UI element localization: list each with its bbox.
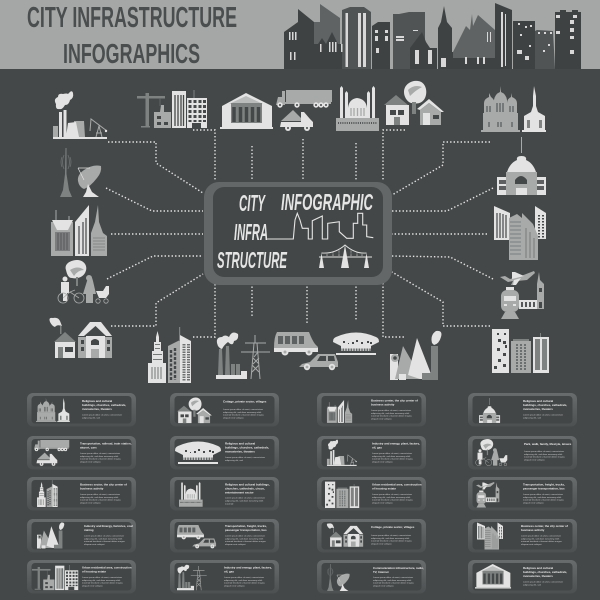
card: column 3 row 1: Lorem ipsum dolor sit amet, consectetuer [371,409,411,412]
card: column 2 row 4: euismod tincidunt ut laoreet dolore magna [225,540,267,543]
card: column 3 row 5: adipiscing elit, sed diam nonummy nibh [373,579,412,582]
card: column 4 row 2: Park, walk, family, lifestyle, leisure [524,442,572,446]
central title text: INFOGRAPHIC [281,189,373,215]
card: column 4 row 5: Lorem ipsum dolor sit amet, consectetuer [523,580,563,584]
card: column 1 row 2 [27,436,136,470]
card: column 4 row 1: buildings, churches, cathedrals, [523,403,567,407]
icon: houses [49,318,112,358]
card: column 4 row 3: adipiscing elit, sed diam nonummy nibh [523,496,562,499]
card: column 3 row 5 [317,560,426,594]
card: column 2 row 3: entertainment sector [225,490,254,494]
card: column 4 row 5 [468,560,577,594]
card: column 1 row 2: adipiscing elit, sed diam nonummy nibh [80,455,119,458]
card: column 2 row 4 [170,519,279,552]
icon: churches [481,86,546,132]
card: column 2 row 3 [170,477,279,510]
card: column 3 row 5: Communication infrastructure, radio, [373,566,424,570]
card: column 1 row 5: aliquam erat volutpat. [82,584,103,587]
card: column 2 row 4: Lorem ipsum dolor sit amet, consectetuer [225,534,265,538]
icon: temple [220,93,273,129]
card: column 1 row 4: aliquam erat volutpat. [84,543,105,546]
card: column 3 row 3: Urban residential area, construction [372,482,422,486]
card: column 4 row 1: adipiscing elit, sed [523,417,542,420]
card: column 4 row 3: Transportation, freight, trucks, [523,482,565,486]
icon: factory [53,91,107,139]
card: column 4 row 3: passenger transportation, bus [523,486,565,490]
card: column 2 row 5: Lorem ipsum dolor sit amet, consectetuer [224,576,264,579]
icon: bus [274,332,318,356]
card: column 2 row 1: Lorem ipsum dolor sit amet, consectetuer [223,408,263,411]
card: column 1 row 2: aliquam erat volutpat. [80,460,101,463]
icon: apartment tower [148,327,191,383]
card: column 4 row 5: monasteries, theaters [523,574,553,578]
card: column 1 row 1: buildings, churches, cathedrals, [82,403,126,407]
card: column 1 row 5 [27,560,136,594]
panel: central title [204,182,392,285]
card: column 3 row 1: Business center, the city center of [371,398,418,402]
card: column 3 row 3: euismod tincidunt ut laoreet dolore magna [372,499,414,502]
card: column 1 row 5: adipiscing elit, sed diam nonummy nibh [82,579,121,582]
card: column 2 row 4: passenger transportation, bus [225,528,267,532]
card: column 3 row 4: adipiscing elit, sed diam nonummy nibh [371,537,410,540]
card: column 3 row 2 [317,436,426,470]
card: column 2 row 5 [170,560,279,594]
card: column 3 row 3: Lorem ipsum dolor sit amet, consectetuer [372,493,412,496]
card: column 3 row 2: Lorem ipsum dolor sit amet, consectetuer [372,452,412,455]
card: column 4 row 1: Lorem ipsum dolor sit amet, consectetuer [523,414,563,416]
card: column 2 row 5: oil, gas [224,569,234,573]
card: column 3 row 5: Lorem ipsum dolor sit amet, consectetuer [373,576,413,579]
card: column 1 row 4: Lorem ipsum dolor sit amet, consectetuer [84,534,124,538]
card: column 2 row 3: Religious and cultural buildings, [225,482,270,486]
card: column 2 row 3: Lorem ipsum dolor sit amet, consectetuer [225,496,265,500]
card: column 1 row 4 [27,519,136,552]
card: column 3 row 2: Industry and energy, plant, factory, [372,442,420,446]
card: column 2 row 2: monasteries, theaters [225,450,255,454]
card: column 3 row 3: aliquam erat volutpat. [372,501,393,504]
card: column 2 row 2: adipiscing elit, sed [225,459,244,462]
card: column 1 row 4: adipiscing elit, sed diam nonummy nibh [84,537,123,540]
card: column 1 row 4: euismod tincidunt ut laoreet dolore magna [84,540,126,543]
card: column 3 row 1 [317,393,426,426]
dotted connectors [106,130,493,337]
card: column 1 row 5: Urban residential area, construction [82,566,132,570]
card: column 4 row 4: euismod tincidunt ut laoreet dolore magna [521,540,563,543]
card: column 1 row 1: Lorem ipsum dolor sit amet, consectetuer [82,414,122,416]
central title text: STRUCTURE [217,247,287,273]
card: column 2 row 2: Lorem ipsum dolor sit amet, consectetuer [225,456,265,459]
title: INFOGRAPHICS [63,38,200,69]
card: column 4 row 4 [468,519,577,552]
card: column 2 row 3: churches, cathedrals, circus, [225,486,265,490]
card: column 1 row 2: airport, cars [80,445,97,449]
card: column 3 row 2: euismod tincidunt ut laoreet dolore magna [372,458,414,461]
card: column 3 row 3 [317,477,426,510]
icon: cottages and tree [384,81,444,125]
card: column 4 row 5: Religious and cultural [523,566,553,570]
card: column 1 row 1: Religious and cultural [82,399,112,403]
icon: antenna and dish [60,148,101,197]
card: column 1 row 3: business activity [80,486,104,490]
card: column 4 row 4: aliquam erat volutpat. [521,543,542,546]
card: column 3 row 4: Cottage, private sector, villages [371,525,415,529]
card: column 4 row 2 [468,436,577,470]
card: column 4 row 4: business activity [521,528,545,532]
icon: factory and pylon [216,333,270,379]
card: column 3 row 1: euismod tincidunt ut laoreet dolore magna [371,415,413,418]
card: column 1 row 3: Lorem ipsum dolor sit amet, consectetuer [80,493,120,496]
card: column 4 row 2: Lorem ipsum dolor sit amet, consectetuer [524,450,564,453]
card: column 1 row 5: euismod tincidunt ut laoreet dolore magna [82,582,124,585]
card: column 3 row 4: Lorem ipsum dolor sit amet, consectetuer [371,534,411,537]
card: column 2 row 1: aliquam erat volutpat. [223,416,244,419]
card: column 1 row 1: monasteries, theaters [82,407,112,411]
card: column 3 row 2: adipiscing elit, sed diam nonummy nibh [372,455,411,458]
icon: skyline outline [267,213,373,239]
card: column 3 row 5: euismod tincidunt ut laoreet dolore magna [373,582,415,585]
card: column 3 row 1: aliquam erat volutpat. [371,417,392,420]
card: column 2 row 3: euismod [225,504,234,506]
card: column 1 row 3 [27,477,136,510]
icon: bridge [319,245,372,268]
icon: plane [500,271,535,285]
card: column 3 row 1: business activity [371,402,395,406]
card: column 4 row 4: Lorem ipsum dolor sit amet, consectetuer [521,534,561,538]
icon: domed building [497,137,546,195]
card: column 3 row 3: of housing estate [372,486,396,490]
card: column 3 row 2: oil, gas [372,445,382,449]
card: column 4 row 1 [468,393,577,426]
card: column 1 row 2: Lorem ipsum dolor sit amet, consectetuer [80,452,120,455]
card: column 2 row 2: buildings, churches, cathedrals, [225,446,269,450]
card: column 4 row 3: Lorem ipsum dolor sit amet, consectetuer [523,493,563,496]
central title text [217,189,373,273]
card: column 4 row 5: buildings, churches, cathedrals, [523,570,567,574]
card: column 4 row 2: euismod tincidunt ut laoreet dolore magna [524,456,566,459]
card: column 2 row 4: Transportation, freight, trucks, [225,524,267,528]
card: column 1 row 5: Lorem ipsum dolor sit amet, consectetuer [82,576,122,579]
card: column 2 row 1: Cottage, private sector, villages [223,400,267,404]
title: CITY INFRASTRUCTURE [27,2,237,34]
card: column 1 row 5: of housing estate [82,569,106,573]
card: column 1 row 2: Transportation, railroad, train station, [80,442,132,446]
card: column 3 row 5: TV, Internet [373,570,389,574]
icon: apartment buildings [492,329,549,373]
card: column 1 row 2: euismod tincidunt ut laoreet dolore magna [80,458,122,461]
card: column 1 row 1 [27,393,136,426]
card: column 4 row 1: Religious and cultural [523,399,553,403]
card: column 4 row 3: aliquam erat volutpat. [523,501,544,504]
card: column 2 row 1: adipiscing elit, sed diam nonummy nibh [223,411,262,414]
icon: park and family [58,260,109,303]
icon: stadium [333,332,379,355]
icon: mountains and oil plant [390,331,441,380]
card: column 2 row 5: Industry and energy, plant, factory, [224,566,272,570]
card: column 2 row 2 [170,436,279,470]
card: column 1 row 3: adipiscing elit, sed diam nonummy nibh [80,496,119,499]
card: column 3 row 4: aliquam erat volutpat. [371,542,392,545]
header skyline [284,3,581,69]
card: column 4 row 2: adipiscing elit, sed diam nonummy nibh [524,453,563,456]
card: column 3 row 3: adipiscing elit, sed diam nonummy nibh [372,496,411,499]
card: column 2 row 1: euismod tincidunt ut laoreet dolore magna [223,414,265,417]
card: column 4 row 3 [468,477,577,510]
card: column 2 row 5: aliquam erat volutpat. [224,584,245,587]
card: column 2 row 1 [170,393,279,426]
card: column 2 row 4: aliquam erat volutpat. [225,543,246,546]
card: column 1 row 3: aliquam erat volutpat. [80,501,101,504]
icon: mosque [336,86,379,131]
card: column 4 row 1: monasteries, theaters [523,407,553,411]
card: column 4 row 3: euismod tincidunt ut laoreet dolore magna [523,499,565,502]
card: column 2 row 3: adipiscing elit, sed diam nonummy nibh [225,500,264,502]
header band [0,0,600,69]
card: column 3 row 4 [317,519,426,552]
central title text: CITY [239,190,266,216]
card: column 1 row 3: euismod tincidunt ut laoreet dolore magna [80,499,122,502]
card: column 1 row 4: Industry and Energy, factories, coal [84,524,133,528]
title [27,2,237,69]
card: column 1 row 1: adipiscing elit, sed [82,417,101,420]
icon: crane and residential buildings [137,90,207,128]
icon: trucks [276,90,332,131]
card: column 3 row 2: aliquam erat volutpat. [372,460,393,463]
icon: car [299,354,338,370]
card: column 3 row 5: aliquam erat volutpat. [373,584,394,587]
card: column 4 row 2: aliquam erat volutpat. [524,458,545,461]
central title text: INFRA [234,219,268,245]
card: column 4 row 5: adipiscing elit, sed [523,584,542,587]
icon: train and station [501,272,544,319]
card: column 3 row 1: adipiscing elit, sed diam nonummy nibh [371,412,410,415]
card: column 4 row 4: adipiscing elit, sed diam nonummy nibh [521,537,560,540]
card: column 2 row 4: adipiscing elit, sed diam nonummy nibh [225,537,264,540]
icon: skyscrapers [51,205,107,256]
card: column 1 row 3: Business sector, the city center of [80,482,127,486]
card: column 1 row 4: mining [84,528,94,532]
card: column 2 row 2: Religious and cultural [225,442,255,446]
card: column 4 row 4: Business center, the city center of [521,524,568,528]
card: column 3 row 4: euismod tincidunt ut laoreet dolore magna [371,540,413,543]
card: column 2 row 5: euismod tincidunt ut laoreet dolore magna [224,582,266,585]
icon: business towers [494,206,546,260]
card: column 2 row 5: adipiscing elit, sed diam nonummy nibh [224,579,263,582]
